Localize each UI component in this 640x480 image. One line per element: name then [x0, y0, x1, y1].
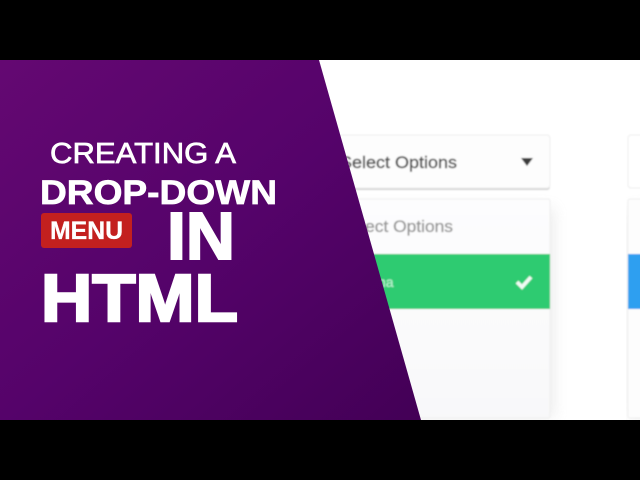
title word: in: IN [167, 199, 235, 274]
title word: html: HTML [41, 261, 238, 336]
select box label: Select Options [340, 153, 457, 172]
title line: creating a: CREATING A [50, 138, 237, 170]
icon: check mark [517, 277, 531, 287]
bottom letterbox bar [0, 420, 640, 480]
list panel [300, 199, 550, 418]
selected row label: na [378, 274, 394, 290]
right select box [628, 135, 640, 188]
menu badge: MENU [50, 217, 123, 245]
select box shadow [300, 137, 550, 190]
title [40, 138, 277, 336]
right blue row [628, 254, 640, 309]
list panel shadow [300, 208, 554, 418]
white screenshot background [0, 60, 640, 420]
icon: drop-down arrow [521, 158, 533, 166]
panel: left drop-down example [300, 135, 554, 418]
top letterbox bar [0, 0, 640, 60]
menu badge [41, 213, 132, 248]
title line: drop-down: DROP-DOWN [40, 174, 277, 212]
select box [300, 135, 550, 188]
list header option: Select Options [340, 218, 453, 236]
right panel shadow [630, 208, 640, 418]
right list panel [628, 199, 640, 418]
panel: right drop-down example [628, 135, 640, 418]
selected green row [300, 254, 550, 309]
purple diagonal panel [0, 60, 421, 420]
